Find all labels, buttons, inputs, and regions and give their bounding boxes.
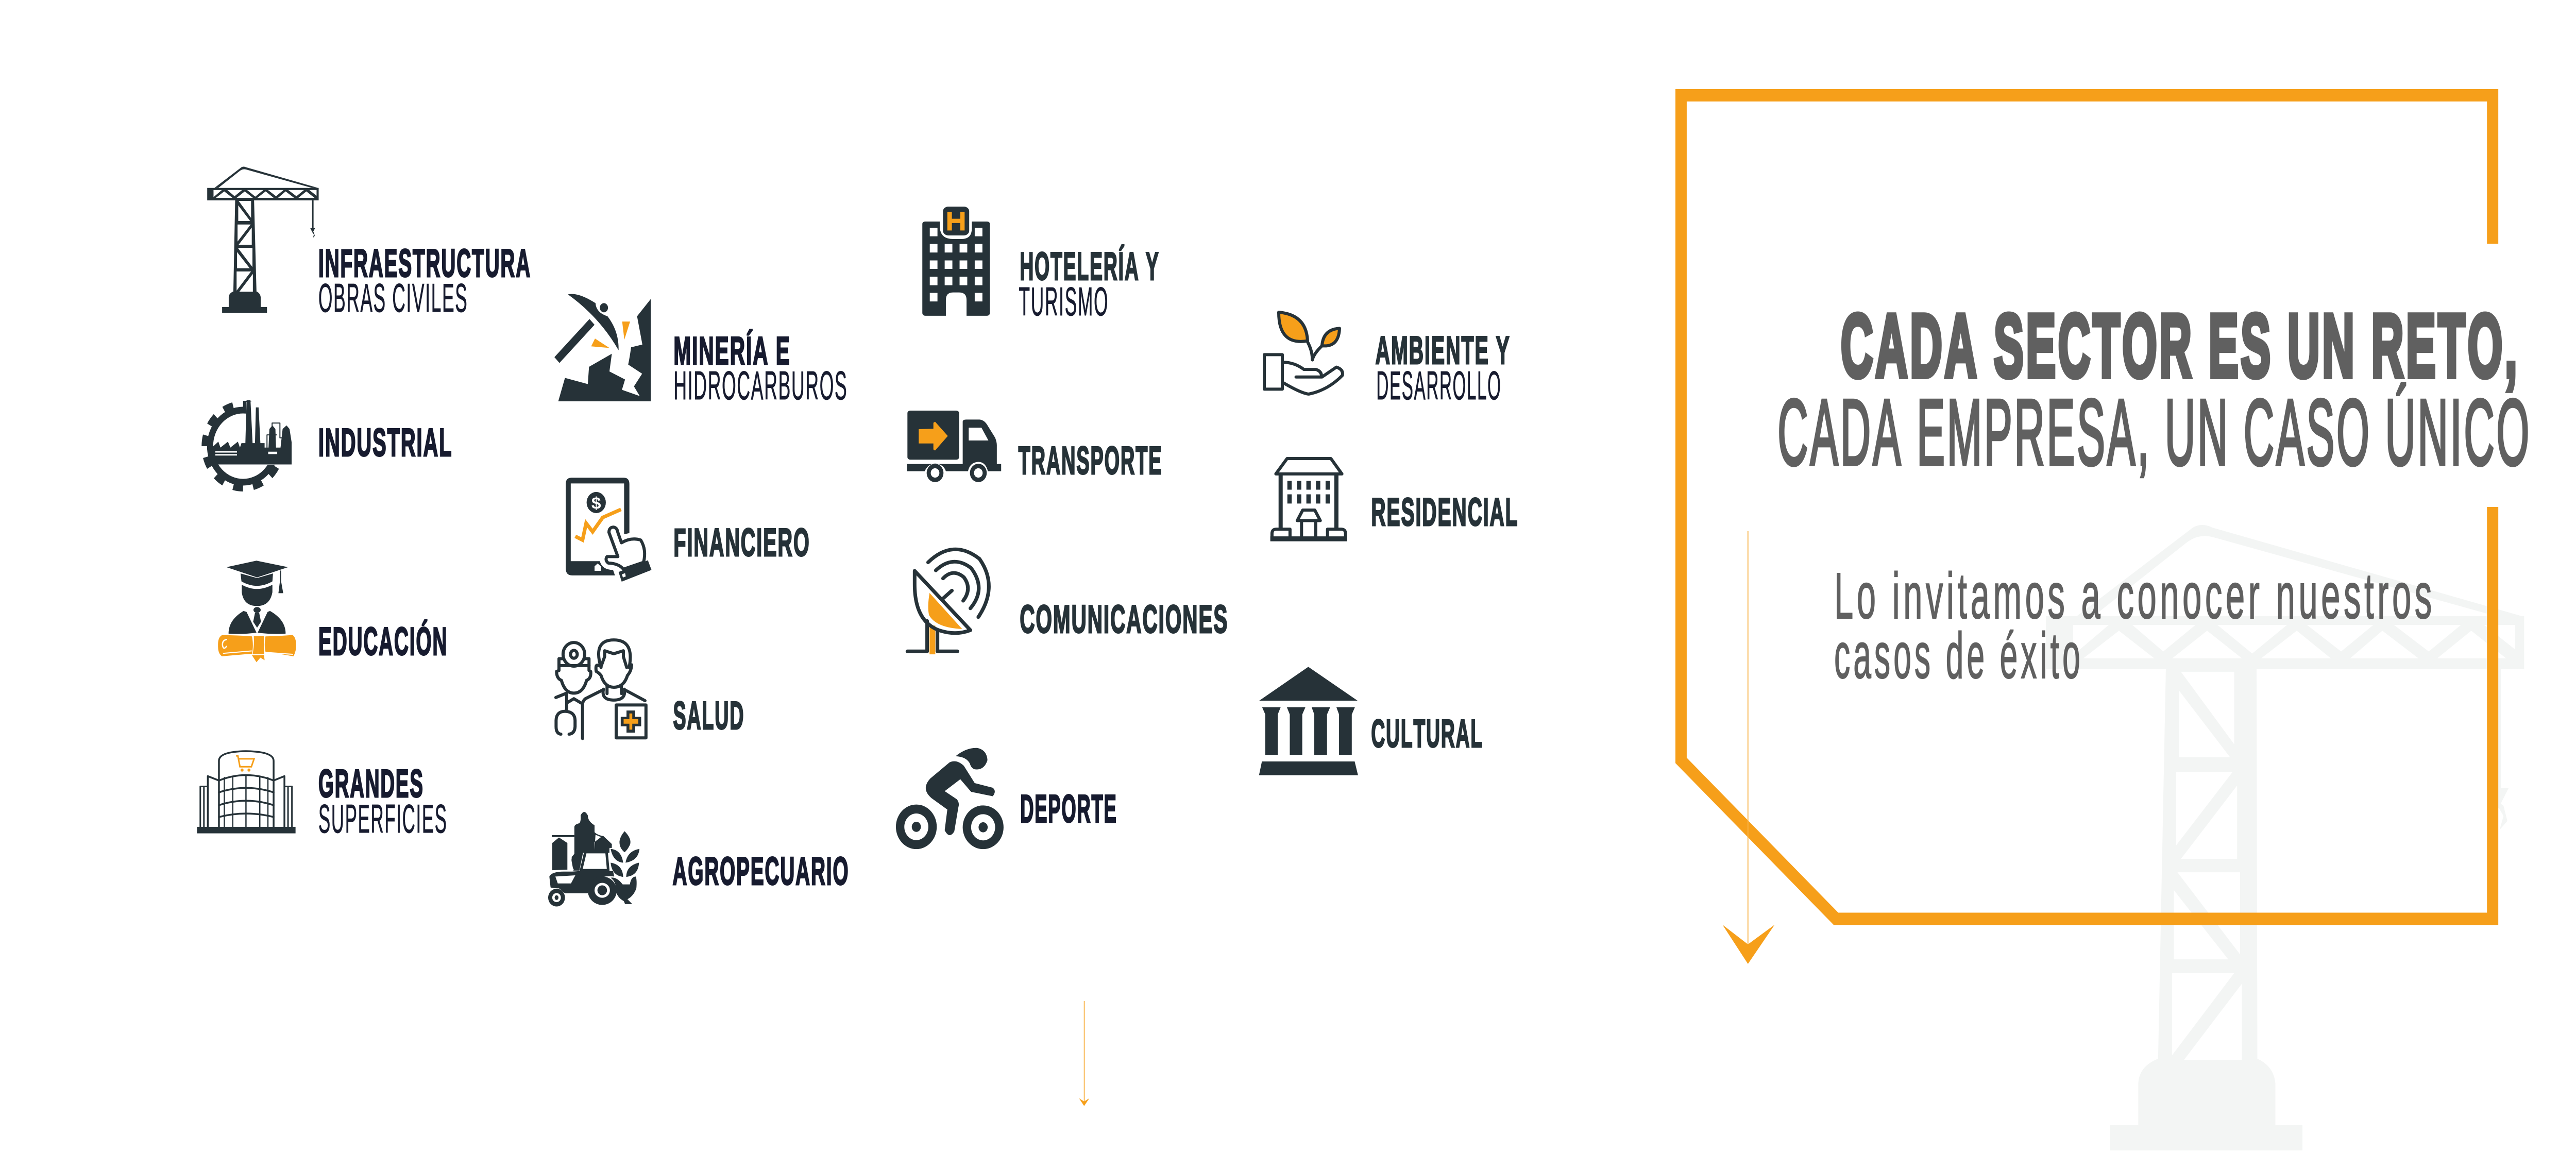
icon: cyclist (896, 748, 1004, 849)
arrow: long thin down arrow (1722, 531, 1775, 964)
label: cultural: CULTURAL (1371, 711, 1483, 756)
icon: tablet finance (566, 478, 652, 582)
label: hotelería y turismo: HOTELERÍA Y (1020, 244, 1160, 289)
icon: satellite dish (907, 549, 989, 654)
label: deporte: DEPORTE (1020, 787, 1117, 831)
label: industrial: INDUSTRIAL (318, 420, 452, 464)
icon: gear factory (205, 400, 293, 488)
label: financiero: FINANCIERO (673, 520, 810, 564)
label: ambiente y desarrollo: AMBIENTE Y (1376, 328, 1511, 372)
label: ambiente y desarrollo: DESARROLLO (1376, 363, 1502, 408)
icon: residential building (1270, 459, 1347, 541)
heading: cada empresa, un caso único: CADA EMPRESA, UN CASO ÚNICO (1777, 380, 2531, 485)
label: agropecuario: AGROPECUARIO (673, 849, 849, 893)
label: ambiente y desarrollo (1376, 328, 1511, 408)
icon: hotel (922, 207, 990, 316)
arrow: small down arrow (1079, 1001, 1089, 1106)
label: infraestructura obras civiles (318, 241, 531, 320)
icon: crane (207, 166, 319, 313)
label: hotelería y turismo: TURISMO (1019, 279, 1109, 324)
label: grandes superficies: GRANDES (318, 762, 424, 805)
label: minería e hidrocarburos: HIDROCARBUROS (673, 363, 848, 408)
text block: invitation: casos de éxito (1834, 620, 2083, 692)
label: grandes superficies: SUPERFICIES (318, 796, 448, 841)
label: infraestructura obras civiles: INFRAESTRUCTURA (318, 241, 531, 285)
heading: cada sector es un reto: CADA SECTOR ES UN RETO, (1841, 296, 2519, 396)
label: minería e hidrocarburos: MINERÍA E (673, 329, 791, 372)
label: educación: EDUCACIÓN (318, 619, 448, 663)
label: transporte: TRANSPORTE (1019, 439, 1162, 482)
icon: agriculture (548, 812, 639, 907)
label: infraestructura obras civiles: OBRAS CIVILES (318, 275, 468, 320)
background crane watermark (2046, 525, 2524, 1150)
label: comunicaciones: COMUNICACIONES (1020, 597, 1228, 641)
icon: tablet finance: $ (591, 494, 601, 512)
icon: plant in hand (1264, 312, 1343, 394)
label: salud: SALUD (673, 694, 744, 737)
frame: orange open border (1681, 95, 2493, 919)
icon: medical staff (556, 640, 646, 738)
icon: mall (197, 751, 296, 834)
label: hotelería y turismo (1019, 244, 1160, 324)
icon: pickaxe and mountain (554, 294, 651, 401)
label: residencial: RESIDENCIAL (1371, 490, 1518, 534)
icon: graduate (218, 561, 296, 662)
label: minería e hidrocarburos (673, 329, 848, 408)
icon: temple (1259, 667, 1358, 775)
icon: truck (907, 411, 1001, 482)
text block: invitation (1834, 561, 2435, 692)
label: grandes superficies (318, 762, 448, 841)
text block: invitation: Lo invitamos a conocer nuestros (1834, 561, 2435, 632)
